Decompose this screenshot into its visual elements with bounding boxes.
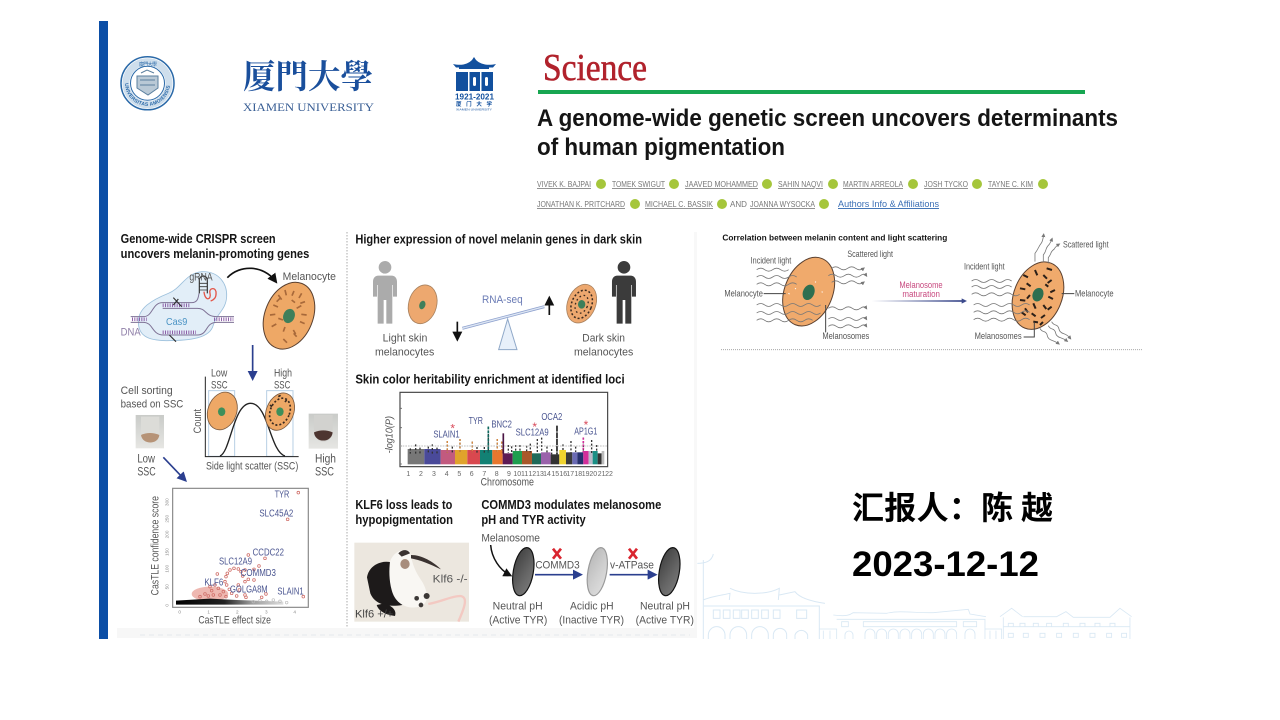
heading: CRISPR screen (121, 232, 309, 261)
heading: CRISPR screen: Genome-wide CRISPR screen (121, 232, 276, 246)
author list: TAYNE C. KIM (988, 180, 1033, 189)
icon: immature melanocyte (773, 250, 844, 334)
labels: left cell: Melanosomes (822, 331, 870, 341)
arrow: COMMD3 step (535, 549, 580, 575)
gene labels (204, 489, 304, 598)
icon: university seal: UNIVERSITAS AMOIENSIS (125, 83, 170, 106)
logo: Xiamen University wordmark: 厦門大學 (243, 51, 373, 98)
author list: JONATHAN K. PRITCHARD (537, 200, 625, 209)
gene labels and stars (433, 412, 597, 440)
heading: KLF6 (355, 498, 453, 527)
chromosome numbers: 5 (457, 471, 461, 478)
labels: tube SSC (137, 451, 336, 479)
chromosome numbers: 4 (445, 471, 449, 478)
axis labels: CasTLE effect size (198, 614, 271, 626)
heading: KLF6: KLF6 loss leads to (355, 498, 453, 512)
gene labels: SLAIN1 (277, 587, 304, 598)
labels: pH states: (Active TYR) (636, 614, 694, 626)
chromosome numbers: 1 (406, 471, 410, 478)
green rule (538, 90, 1085, 94)
heading: CRISPR screen: uncovers melanin-promoting genes (121, 247, 309, 261)
chart: SSC histogram: SSC (274, 380, 291, 392)
chromosome numbers: 14 (543, 471, 551, 478)
photo: low SSC tube (136, 415, 164, 448)
labels: right cell: Melanosomes (975, 331, 1022, 341)
journal masthead: Science: Science (543, 47, 647, 89)
chromosome numbers: 2 (419, 471, 423, 478)
label: dark skin melanocytes: Dark skin (582, 332, 625, 344)
axis labels: 300 (165, 498, 170, 506)
gene labels: SLC45A2 (259, 509, 294, 520)
labels: left cell: Melanocyte (724, 289, 763, 299)
arrow: v-ATPase step: v-ATPase (610, 560, 654, 572)
panel: heritability enrichment (355, 373, 625, 488)
arrow: melanosome maturation: Melanosome (899, 280, 943, 290)
chromosome numbers: 11 (521, 471, 528, 478)
arrow: COMMD3 step: COMMD3 (535, 560, 580, 572)
chromosome numbers: 13 (536, 471, 544, 478)
labels: tube SSC: Low (137, 451, 155, 465)
axis labels: 2 (236, 609, 239, 614)
axis labels: 3 (265, 609, 268, 614)
author list: AND (730, 200, 747, 209)
axis labels: 150 (165, 548, 170, 556)
axis labels: 100 (165, 564, 170, 573)
chromosome numbers: 17 (566, 471, 574, 478)
chromosome numbers: 21 (598, 471, 606, 478)
chromosome numbers (406, 471, 613, 478)
chromosome numbers: 18 (574, 471, 582, 478)
labels: left cell: Scattered light (847, 249, 893, 259)
labels: tube SSC: SSC (137, 465, 156, 479)
pointers: left cell (764, 294, 826, 332)
label: dark skin melanocytes (574, 332, 634, 358)
chromosome numbers: 22 (605, 471, 613, 478)
chart: Manhattan plot (384, 392, 613, 488)
label: cell sorting: based on SSC (121, 398, 183, 410)
label: cell sorting: Cell sorting (121, 385, 173, 397)
heading: skin color heritability: Skin color heritability enrichment at identified loci (355, 373, 625, 387)
gene labels: SLC12A9 (219, 556, 252, 567)
author list: TOMEK SWIGUT (612, 180, 665, 189)
label: dark skin melanocytes: melanocytes (574, 346, 634, 358)
gene labels and stars: TYR (469, 416, 483, 427)
diagram: Cas9 and DNA: DNA (121, 327, 141, 339)
gene labels and stars: SLAIN1 (433, 429, 460, 440)
labels: pH states: Neutral pH (640, 600, 690, 612)
presentation date: 2023-12-12 (852, 545, 1039, 584)
labels: tube SSC: High (315, 451, 336, 465)
chromosome numbers: 10 (513, 471, 521, 478)
axis labels: 50 (165, 584, 170, 589)
blue side bar (99, 21, 108, 639)
gene labels and stars: AP1G1 (574, 427, 597, 438)
arrow: down to sorting (250, 345, 255, 378)
label: Melanocyte: Melanocyte (283, 271, 336, 283)
heading: KLF6: hypopigmentation (355, 513, 453, 527)
diagram: RNA-seq balance (457, 294, 549, 350)
chart: Manhattan plot: * (450, 421, 455, 435)
author list: JAAVED MOHAMMED (685, 180, 758, 189)
pointers: right cell (1024, 294, 1074, 337)
photo: mice: Klf6 +/+ (355, 609, 393, 621)
gene labels: GOLGA8M (230, 584, 268, 595)
chart: CasTLE scatter plot (150, 488, 308, 626)
icon: university seal: 廈門大學 (139, 61, 157, 68)
chart: Manhattan plot: * (532, 420, 537, 434)
light waves: left cell (757, 267, 866, 328)
chromosome numbers: 6 (470, 471, 474, 478)
labels: right cell: Incident light (964, 261, 1005, 271)
photo: mice: Klf6 -/- (433, 574, 468, 586)
campus skyline watermark (697, 554, 1132, 639)
diagram: Cas9 and DNA (121, 271, 234, 342)
chromosome numbers: 20 (589, 471, 597, 478)
labels: right cell (964, 240, 1114, 341)
author list: JOANNA WYSOCKA (750, 200, 816, 209)
arrow: melanosome pointer (491, 545, 510, 575)
label: light skin melanocytes (375, 332, 435, 358)
chart: SSC histogram: High (274, 368, 292, 380)
labels: tube SSC: SSC (315, 465, 334, 479)
axis labels: 200 (165, 530, 170, 538)
gene labels and stars: OCA2 (541, 412, 563, 423)
logo: centenary 1921-2021: 1921-2021 (455, 92, 494, 102)
panel: light scattering (721, 233, 1142, 350)
diagram: Cas9 and DNA: Cas9 (166, 317, 188, 328)
chart: SSC histogram: Low (211, 368, 228, 380)
logo: centenary 1921-2021: 厦 门 大 学 (456, 100, 492, 108)
chromosome numbers: 12 (528, 471, 536, 478)
label: light skin melanocytes: melanocytes (375, 346, 435, 358)
axis labels: CasTLE confidence score (150, 496, 162, 595)
heading: COMMD3 (481, 498, 661, 527)
photo: mice (354, 543, 469, 622)
labels: left cell (724, 249, 893, 341)
author list: Authors Info & Affiliations (838, 199, 939, 210)
author list: JOSH TYCKO (924, 180, 968, 189)
icon: active melanosome 2 (655, 546, 683, 597)
arrow: to scatter plot (163, 457, 185, 480)
author list: MARTIN ARREOLA (843, 180, 904, 189)
chromosome numbers: 16 (559, 471, 567, 478)
logo: centenary 1921-2021: XIAMEN UNIVERSITY (456, 108, 492, 112)
author list: VIVEK K. BAJPAI (537, 180, 591, 189)
icon: mature melanocyte (1003, 254, 1073, 337)
labels: pH states: Neutral pH (493, 600, 543, 612)
icon: dark skin person (612, 261, 636, 324)
chromosome numbers: 7 (482, 471, 486, 478)
light waves: right cell (972, 235, 1070, 344)
diagram: RNA-seq balance: RNA-seq (482, 294, 523, 306)
labels: pH states (489, 600, 694, 626)
logo: centenary 1921-2021 (453, 57, 496, 112)
chart: SSC histogram: SSC (211, 380, 228, 392)
panel: KLF6 and COMMD3 (354, 498, 694, 626)
article title (537, 105, 1118, 161)
icon: light melanocyte (404, 282, 441, 327)
arrow: curved to melanocyte (227, 268, 275, 281)
author list (537, 179, 1048, 210)
chromosome numbers: 8 (495, 471, 499, 478)
photo: high SSC tube (309, 414, 338, 449)
chromosome numbers: 9 (507, 471, 511, 478)
axis labels (150, 496, 296, 626)
gene labels: COMMD3 (241, 568, 276, 579)
axis labels: 250 (165, 514, 170, 523)
black non-hit smear (176, 599, 283, 605)
labels: pH states: (Inactive TYR) (559, 614, 624, 626)
labels: right cell: Melanocyte (1075, 289, 1114, 299)
chart: Manhattan plot: * (584, 418, 589, 432)
label: cell sorting (121, 385, 183, 410)
author list: MICHAEL C. BASSIK (645, 200, 714, 209)
labels: left cell: Incident light (751, 256, 792, 266)
gene labels and stars: BNC2 (491, 420, 512, 431)
labels: pH states: (Active TYR) (489, 614, 548, 626)
axis labels: 0 (178, 609, 181, 614)
chromosome numbers: 19 (582, 471, 590, 478)
heading: COMMD3: COMMD3 modulates melanosome (481, 498, 661, 512)
label: light skin melanocytes: Light skin (383, 332, 427, 344)
article title: of human pigmentation (537, 134, 785, 161)
gene labels and stars: SLC12A9 (516, 428, 549, 439)
arrow: v-ATPase step (610, 549, 654, 575)
presenter name: 汇报人：陈 越 (852, 483, 1053, 529)
author list: SAHIN NAQVI (778, 180, 823, 189)
logo: Xiamen University wordmark: XIAMEN UNIVERSITY (243, 102, 375, 114)
article title: A genome-wide genetic screen uncovers determinants (537, 105, 1118, 132)
labels: right cell: Scattered light (1063, 240, 1109, 250)
chart: SSC histogram: Side light scatter (SSC) (206, 460, 298, 472)
icon: melanocyte cell (254, 275, 324, 357)
red hit cloud (192, 587, 228, 601)
heading: COMMD3: pH and TYR activity (481, 513, 586, 527)
chart: SSC histogram (192, 368, 300, 472)
panel: expression in dark skin (355, 233, 642, 358)
icon: light skin person (373, 261, 397, 324)
axis labels: 1 (207, 609, 210, 614)
icon: inactive melanosome (584, 546, 611, 597)
icon: university seal (120, 56, 175, 110)
diagram: Cas9 and DNA: gRNA (189, 271, 213, 283)
chart: Manhattan plot: Chromosome (481, 476, 534, 488)
panel: CRISPR screen (121, 232, 338, 480)
gene labels: CCDC22 (253, 548, 284, 559)
labels: pH states: Acidic pH (570, 600, 614, 612)
icon: active melanosome (509, 546, 537, 597)
panel: graphical abstract background (117, 232, 697, 638)
label: Melanosome: Melanosome (481, 533, 540, 545)
axis labels: 4 (293, 609, 296, 614)
arrow: melanosome maturation (872, 280, 967, 304)
gene labels: KLF6 (204, 578, 224, 589)
heading: correlation: Correlation between melanin content and light scattering (722, 233, 947, 243)
y-axis label: -log10(P) (384, 416, 395, 453)
arrow: melanosome maturation: maturation (902, 289, 940, 299)
chromosome numbers: 15 (551, 471, 559, 478)
chart: SSC histogram: Count (192, 409, 204, 433)
axis labels: 0 (165, 604, 170, 607)
chromosome numbers: 3 (432, 471, 436, 478)
icon: dark melanocyte (561, 280, 602, 327)
gene labels: TYR (275, 489, 289, 500)
heading: higher expression: Higher expression of novel melanin genes in dark skin (355, 233, 642, 247)
